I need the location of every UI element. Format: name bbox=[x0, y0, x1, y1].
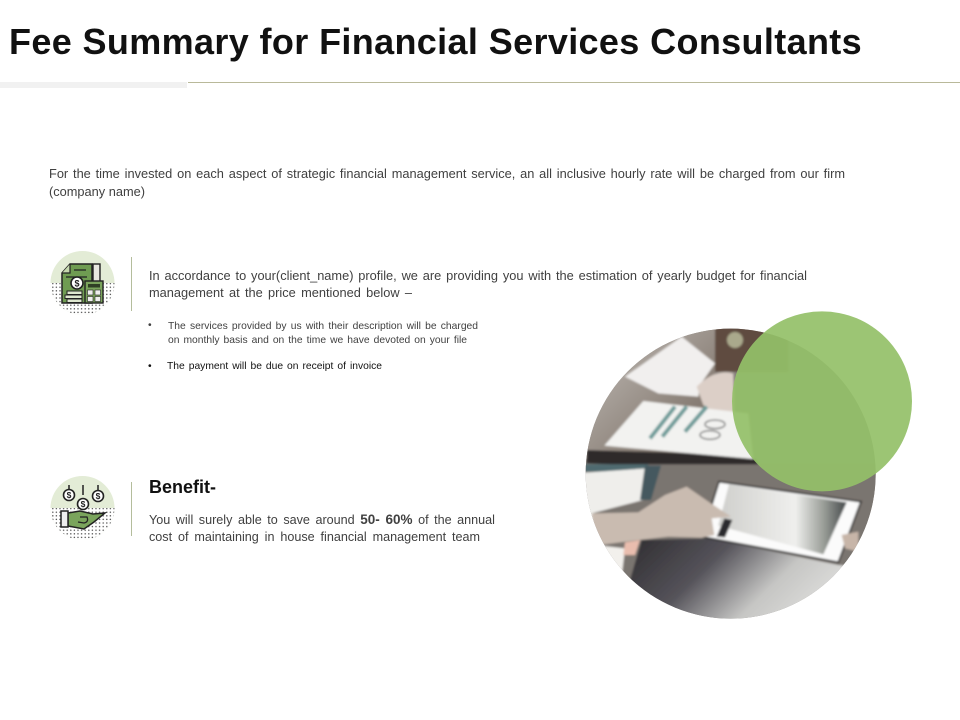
icon: hand receiving coins bbox=[50, 476, 114, 540]
budget estimation paragraph: In accordance to your(client_name) profile, we are providing you with the estimation of yearly budget for financial bbox=[149, 268, 807, 283]
bullet: monthly charges: The services provided by us with their description will be charged bbox=[168, 321, 478, 332]
icon: hand receiving coins: $ bbox=[67, 490, 72, 500]
bullet: monthly charges bbox=[148, 320, 478, 346]
photo: hands using tablet, with green circle overlay bbox=[586, 311, 912, 619]
title: Fee Summary for Financial Services Consultants bbox=[9, 21, 862, 62]
intro text block: (company name) bbox=[49, 184, 145, 199]
bullet list bbox=[148, 320, 478, 372]
icon: budget documents and calculator bbox=[50, 251, 114, 315]
benefit heading: Benefit- bbox=[149, 477, 216, 497]
bullet: monthly charges: • bbox=[148, 320, 152, 331]
bullet: monthly charges: on monthly basis and on the time we have devoted on your file bbox=[168, 335, 467, 346]
budget estimation paragraph bbox=[149, 268, 807, 300]
benefit text bbox=[149, 512, 495, 544]
benefit text: You will surely able to save around 50- 60% of the annual bbox=[149, 512, 495, 527]
bullet: payment terms: • bbox=[148, 361, 152, 372]
green circle bbox=[732, 311, 912, 491]
bullet: payment terms: The payment will be due on receipt of invoice bbox=[167, 361, 382, 372]
intro text block bbox=[49, 166, 845, 199]
benefit text: cost of maintaining in house financial management team bbox=[149, 530, 480, 544]
icon: hand receiving coins: $ bbox=[81, 499, 86, 509]
budget estimation paragraph: management at the price mentioned below – bbox=[149, 285, 412, 300]
icon: hand receiving coins: $ bbox=[96, 491, 101, 501]
intro text block: For the time invested on each aspect of strategic financial management service, an all inclusive hourly rate will be charged from our firm bbox=[49, 166, 845, 181]
icon: budget documents and calculator: $ bbox=[74, 278, 80, 288]
photo scene bbox=[586, 328, 876, 619]
